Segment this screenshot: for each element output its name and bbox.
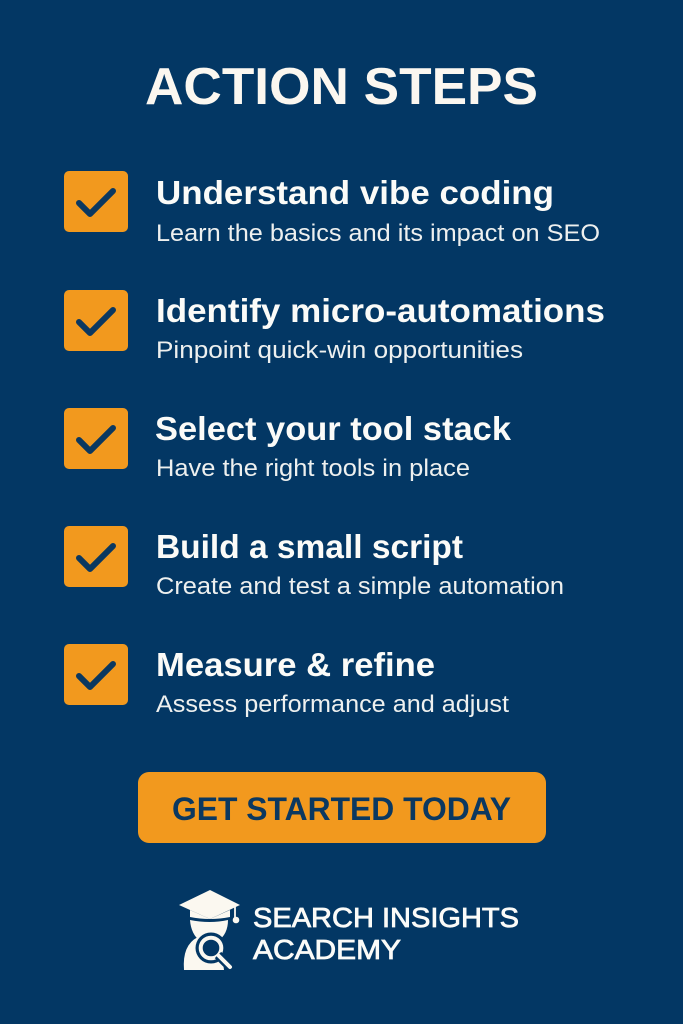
title: ACTION STEPS <box>145 58 538 116</box>
step 5 heading: Measure & refine <box>156 646 435 683</box>
step 5 description: Assess performance and adjust <box>156 691 509 718</box>
step 5 <box>64 644 509 718</box>
step 2 description: Pinpoint quick-win opportunities <box>156 337 523 364</box>
logo <box>179 890 519 970</box>
step 3 description: Have the right tools in place <box>156 455 470 482</box>
icon: graduate with magnifier <box>179 890 240 970</box>
step 1 heading: Understand vibe coding <box>156 174 554 211</box>
step 1 <box>64 171 600 247</box>
icon: checkbox <box>64 171 128 232</box>
step 2 <box>64 290 605 364</box>
icon: checkbox <box>64 408 128 469</box>
step 4 <box>64 526 564 600</box>
step 3 <box>64 408 512 482</box>
button label: GET STARTED TODAY <box>172 791 511 827</box>
step 1 description: Learn the basics and its impact on SEO <box>156 220 600 247</box>
step 2 heading: Identify micro-automations <box>156 292 605 329</box>
icon: checkbox <box>64 526 128 587</box>
logo text line 1: SEARCH INSIGHTS <box>253 902 519 933</box>
logo text line 2: ACADEMY <box>253 934 401 965</box>
icon: checkbox <box>64 290 128 351</box>
icon: checkbox <box>64 644 128 705</box>
step 4 heading: Build a small script <box>156 528 463 565</box>
step 3 heading: Select your tool stack <box>155 410 512 447</box>
step 4 description: Create and test a simple automation <box>156 573 564 600</box>
call to action button <box>138 772 546 843</box>
